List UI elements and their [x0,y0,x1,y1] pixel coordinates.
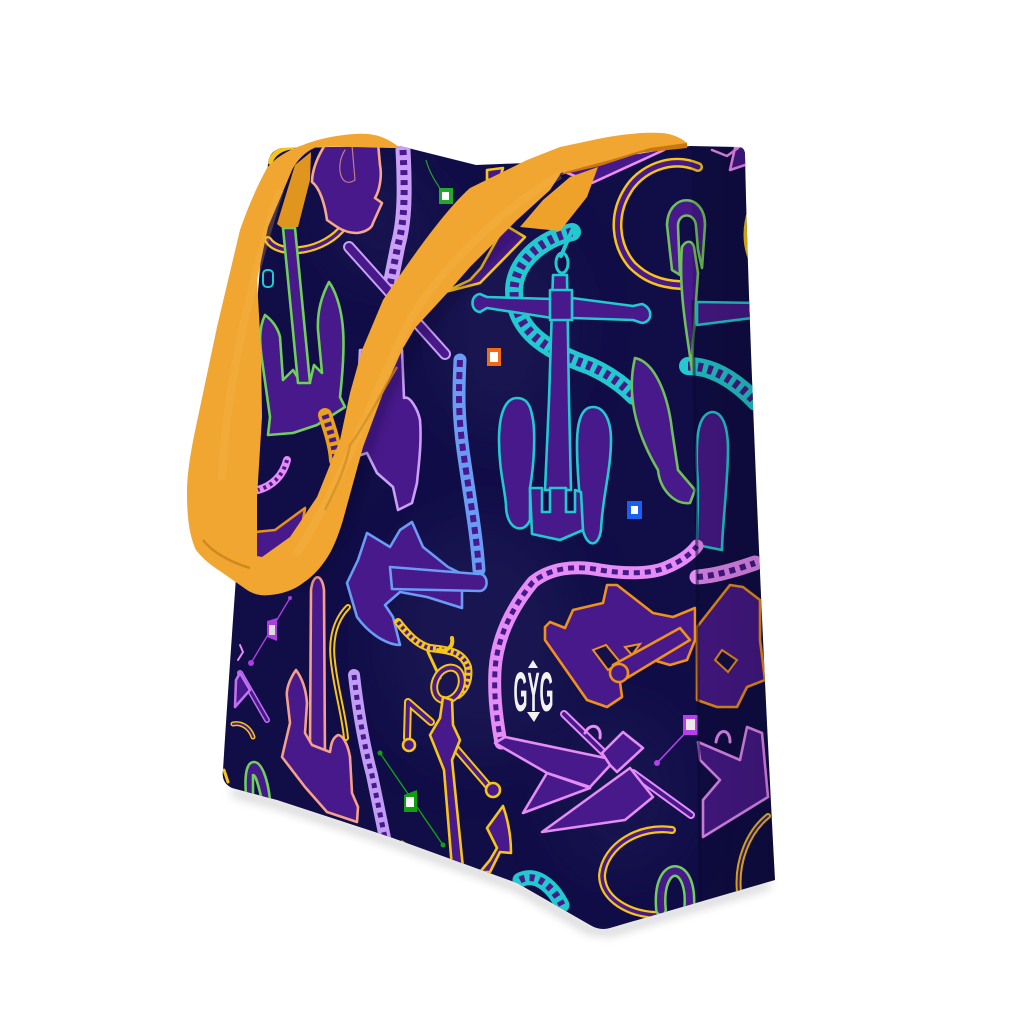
yellow rope bottom right [739,816,768,892]
rear fin [523,773,590,813]
right panel teal fluke [697,412,728,550]
left fluke [499,398,534,528]
bag ground shadow [232,792,770,932]
strap shadow on bag [305,225,520,585]
main fluke [542,768,653,832]
orange fragment beneath strap [255,508,305,560]
anchor top ring [556,253,568,273]
square marker green top [426,160,453,204]
anchor shank [545,275,571,490]
flukes [282,670,358,822]
bag navy fabric [222,146,775,929]
square marker pink [654,715,698,766]
flukes and crown [260,282,345,435]
pink plough anchor [495,714,768,837]
orange strap tab left [277,152,311,228]
side panel fold shading [610,146,775,930]
lavender chain top [390,150,404,285]
yellow curved rope top right [617,163,698,285]
green shackle anchor, side panel [632,200,705,503]
small yellow arc top corner [270,147,292,162]
shackle [667,200,705,275]
teal anchor [472,228,650,543]
yellow curved rope far right [744,214,748,259]
right panel teal chain [688,366,756,402]
violet anchor fluke [355,350,421,510]
shaft [390,567,487,591]
anchor crown [530,488,583,540]
bar [633,773,691,815]
anchor stock bar [472,294,650,323]
right arm [453,745,490,788]
lavender chain lower [354,675,385,838]
orange anchor [545,585,765,707]
orange strap tab right [520,167,598,231]
tote bag body with anchor pattern: GYG [514,660,554,723]
left green anchor [260,228,345,435]
arm [613,628,690,681]
gold anchor fragment behind strap [445,168,525,292]
right fluke [577,407,611,543]
square marker orange [487,348,501,366]
left arm [407,702,431,738]
bottom small yellow line [402,842,412,848]
logo [514,660,554,723]
side panel plough [698,727,768,837]
bottom teal chain [520,878,562,905]
blue anchor [347,522,487,645]
golden anchor [403,697,511,872]
fabric light patch [420,271,625,780]
pink rope side panel [697,563,755,577]
square marker blue [627,501,642,519]
fluke [480,806,511,872]
stock [564,714,603,752]
bottom left green shackle [245,762,270,800]
square marker green bottom [378,750,446,848]
peach lower anchor [282,577,358,822]
side fold dark line [693,300,700,905]
green shackle bottom [661,871,689,910]
violet crossed bar [349,247,445,354]
shank [310,577,325,760]
bottom left yellow curve [233,724,253,737]
main body [545,585,695,707]
bottom corner yellow [224,770,228,782]
yellow rope bottom [602,829,672,915]
yellow curve beside lower anchor [332,607,348,738]
peach anchor fluke top [312,142,382,233]
side shank [681,242,698,370]
small teal ring [263,270,273,287]
peach inner detail [340,145,355,182]
tote bag body with anchor pattern [222,146,775,929]
side panel part [697,585,765,707]
head [347,522,462,645]
gold chain under strap [325,415,336,460]
golden rope and knot [398,622,468,705]
square marker purple [248,596,292,666]
strap lower fold line [203,367,397,568]
right panel teal bar [697,302,760,325]
shank [283,228,310,383]
teal chain arc [514,232,634,396]
top pink edge shapes [562,146,746,184]
small pink ring left edge [238,645,243,660]
frame holes [593,644,640,670]
ring [585,726,600,738]
shank [430,697,463,868]
orange tote strap [187,133,687,595]
blue chain [459,360,479,570]
pink rope [495,546,697,743]
bottom left violet bar [235,673,267,720]
upper blade [495,737,615,787]
block [602,732,643,772]
yellow ring top left [268,226,344,250]
strap highlight texture [222,175,560,555]
green fluke [632,358,695,503]
strap inner dark section [560,134,687,175]
small pink chain curve [258,460,287,490]
